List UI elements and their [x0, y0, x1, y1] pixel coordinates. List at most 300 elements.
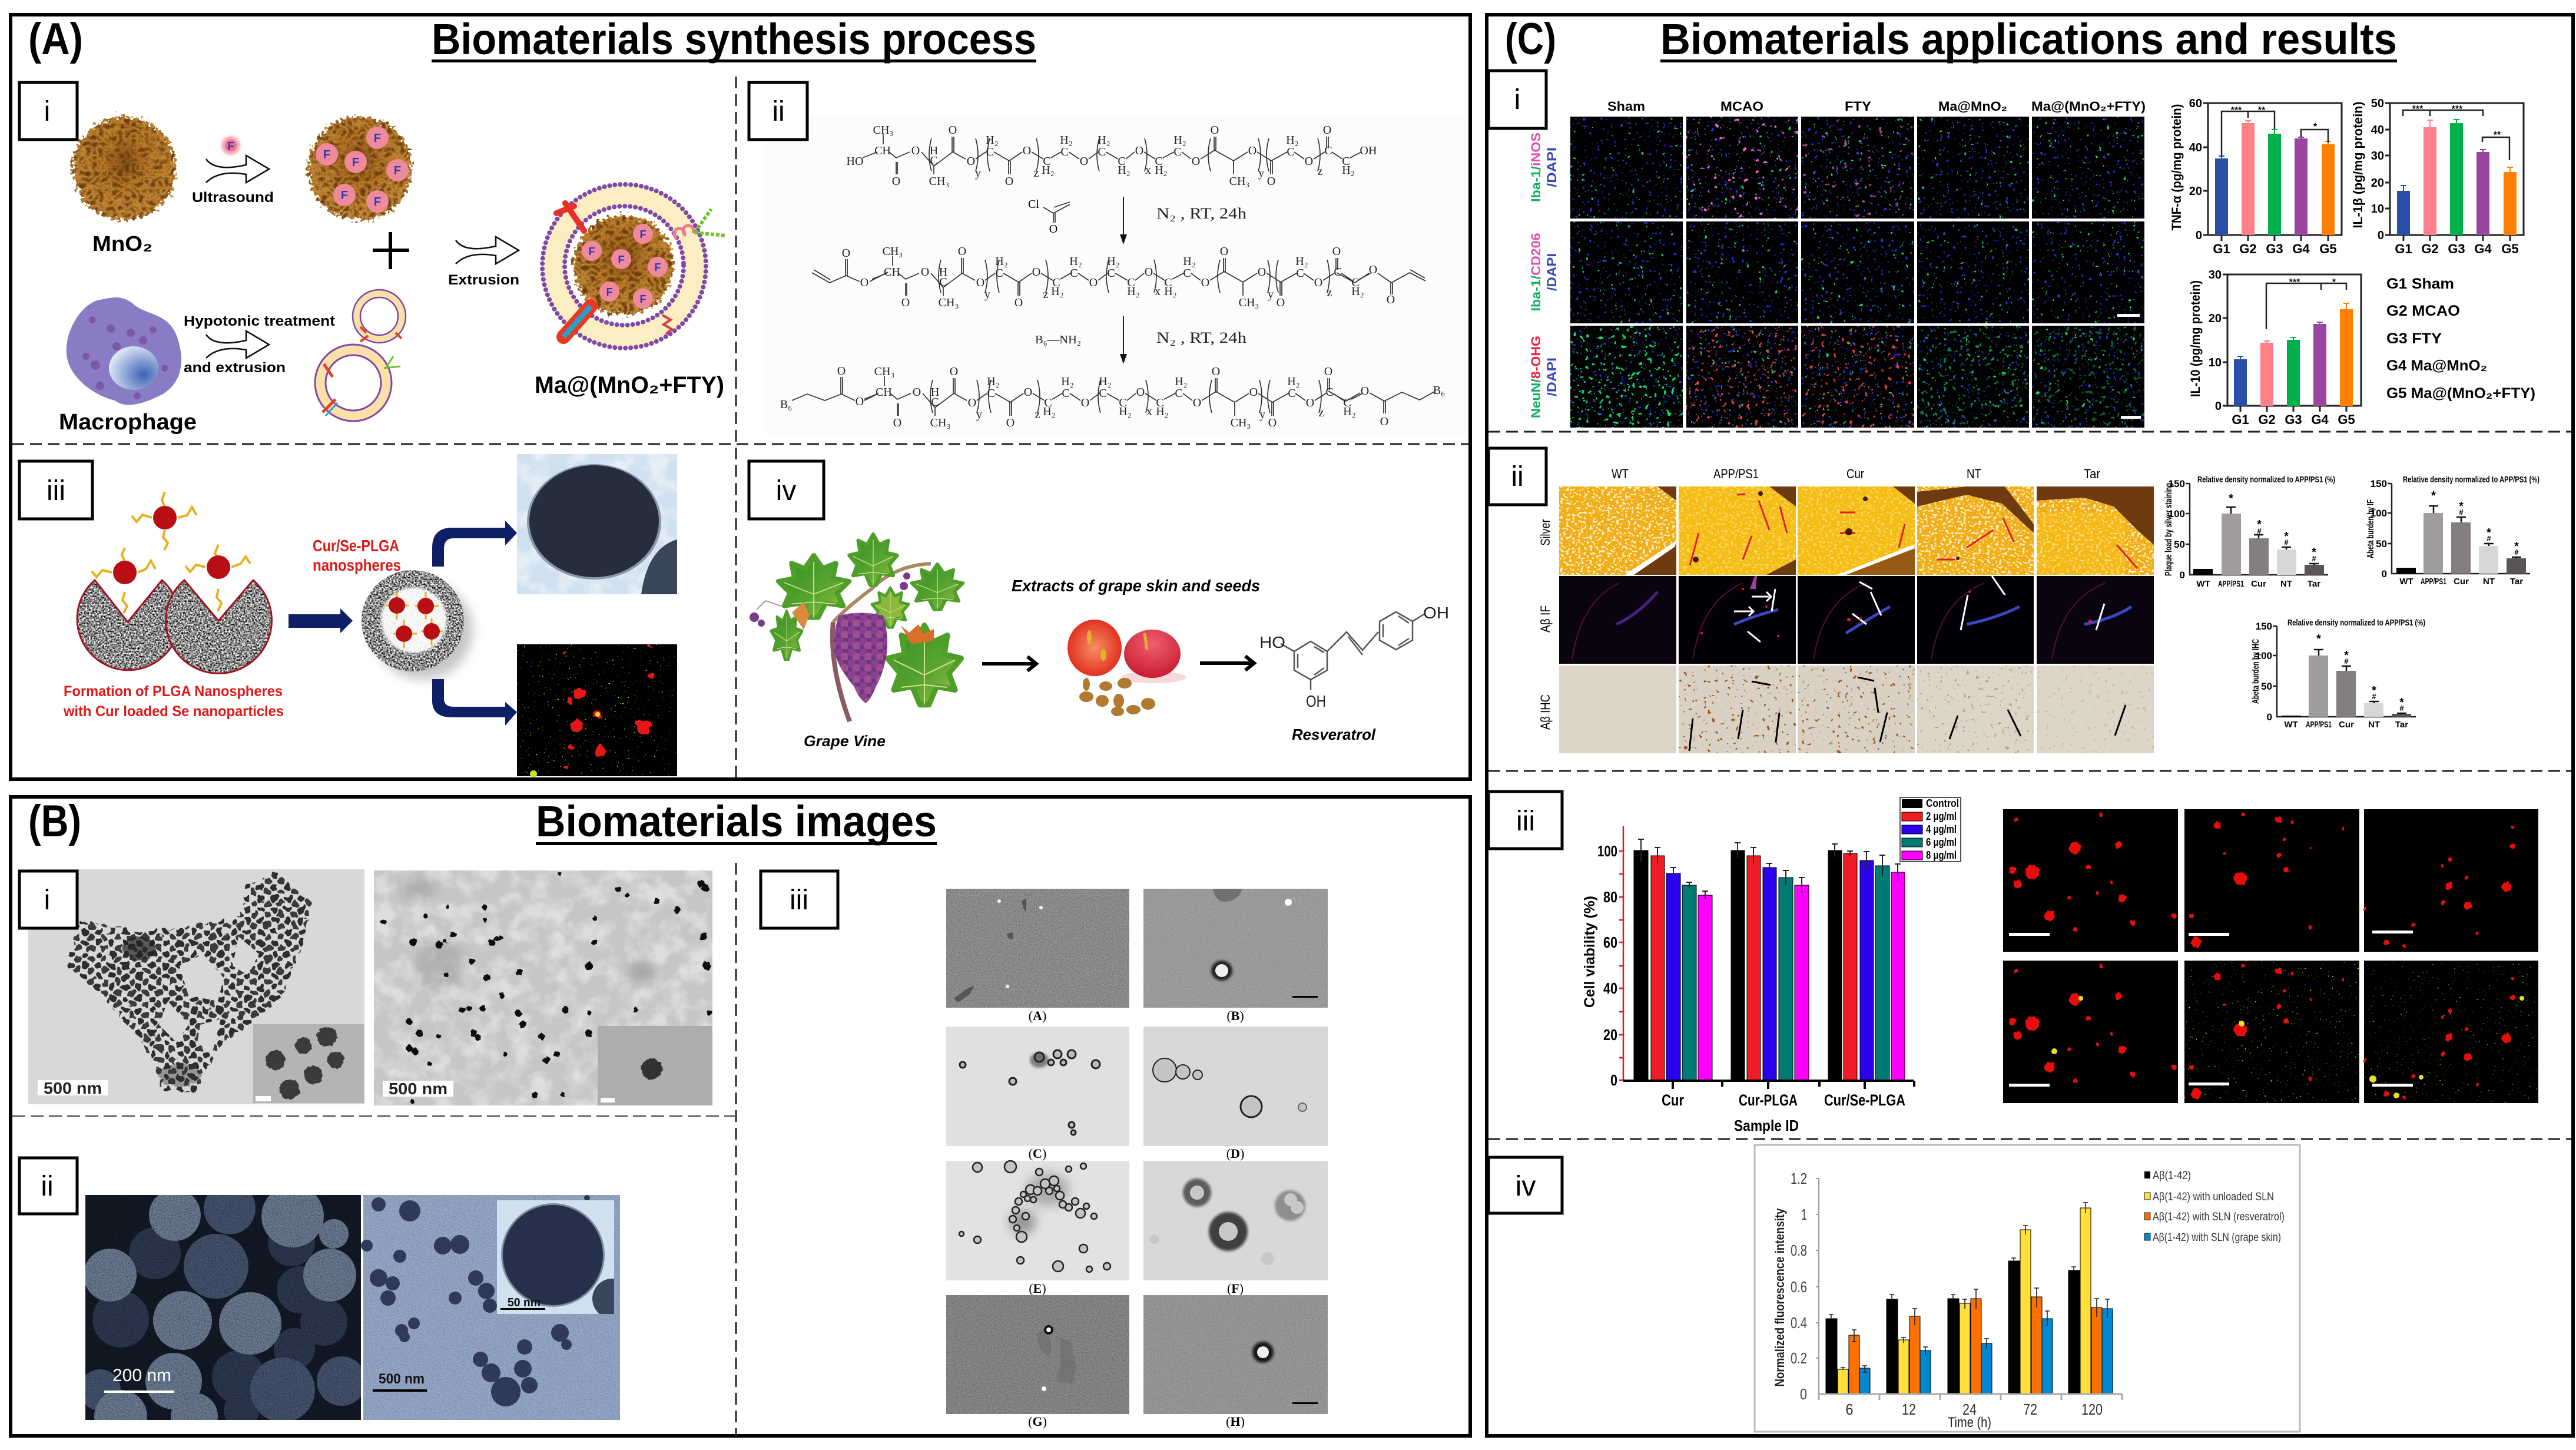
structure 3: O: [1361, 385, 1369, 398]
box label iv: iv: [1516, 1171, 1536, 1202]
sub-panel B-iii: TEM grid A to H: [761, 871, 1328, 1429]
chart: Abeta burden by IF: Cur: [2454, 577, 2469, 587]
structure 3: C: [1156, 396, 1164, 409]
scale 500 nm: 500 nm: [379, 1371, 425, 1387]
title: Biomaterials synthesis process: Biomaterials synthesis process: [432, 15, 1036, 64]
chart: plaque load by silver staining: *: [2257, 518, 2262, 531]
inset: [253, 1024, 364, 1103]
chart: plaque load by silver staining: 0: [2180, 570, 2185, 581]
MnO2 sphere loaded with FTY: F: [341, 189, 348, 202]
box label i: [1488, 71, 1546, 128]
chart: IL-10: [2188, 269, 2361, 427]
structure 3: C: [1099, 387, 1107, 400]
box label ii: [749, 82, 807, 140]
column headers: Ma@MnO₂: [1938, 99, 2007, 114]
box label iii: [19, 461, 92, 519]
grape halves and seeds: [1067, 620, 1186, 716]
structure 2: CH₃: [1239, 296, 1259, 309]
structure 2: C: [1052, 276, 1060, 289]
reaction arrow 1 with acryloyl chloride: O: [1049, 223, 1057, 236]
structure 2: O: [1015, 296, 1023, 309]
legend: Aβ(1-42) with unloaded SLN: [2153, 1191, 2274, 1203]
structure 3: H₂: [1119, 405, 1132, 418]
chart: cell viability: Cur: [1662, 1091, 1684, 1109]
structure 1: z: [1318, 165, 1323, 178]
fluorescence images: red channel row: [2003, 809, 2538, 952]
title: Biomaterials images: Biomaterials images: [536, 797, 937, 846]
column headers: Ma@(MnO₂+FTY): [2031, 99, 2146, 114]
structure 2: C: [1296, 267, 1304, 280]
chart: Abeta burden by IHC: 100: [2256, 650, 2272, 661]
box label ii: ii: [772, 96, 785, 127]
chart: normalized fluorescence intensity: [1755, 1145, 2300, 1432]
Ma@(MnO2+FTY) vesicle: F: [589, 246, 595, 257]
chart: Abeta burden by IHC: WT: [2284, 720, 2298, 730]
row labels: /DAPI: [1544, 147, 1559, 187]
chart: Abeta burden by IHC: 50: [2261, 681, 2272, 692]
row labels: /DAPI: [1544, 357, 1559, 396]
chart: normalized fluorescence intensity: 6: [1845, 1401, 1854, 1418]
box label iii: [761, 871, 838, 928]
structure 2: O: [1332, 245, 1341, 258]
chart: Abeta burden by IF: 100: [2371, 508, 2387, 519]
structure 3: z: [1319, 406, 1324, 419]
structure 3: C: [1288, 387, 1296, 400]
chart: IL-10: ***: [2289, 277, 2300, 287]
chart: Abeta burden by IF: APP/PS1: [2421, 577, 2446, 587]
chart: Abeta burden by IHC: Tar: [2395, 720, 2408, 730]
MnO2 sphere loaded with FTY: F: [323, 148, 330, 161]
structure 3: C: [1062, 387, 1070, 400]
structure 2: O: [958, 245, 966, 258]
chart: cell viability: Cur-PLGA: [1739, 1091, 1798, 1109]
Ma@(MnO2+FTY) vesicle: F: [618, 254, 624, 266]
structure 2: O: [1032, 266, 1040, 279]
structure 1: C: [1060, 145, 1069, 158]
structure 3: CH₃: [874, 365, 894, 378]
structure 2: H₂: [1295, 255, 1308, 268]
structure 2: CH₃: [939, 296, 959, 309]
column headers: Sham: [1607, 99, 1645, 114]
MnO2 sphere loaded with FTY: F: [374, 132, 381, 145]
caption A: (A): [1029, 1008, 1046, 1023]
plus sign: [373, 232, 409, 269]
resveratrol molecule: [1259, 604, 1449, 710]
structure 1: O: [1305, 155, 1313, 168]
fluorescence images: merged row: [2003, 961, 2538, 1103]
structure 3: y: [976, 408, 982, 421]
MnO2 sphere loaded with FTY: F: [394, 164, 401, 177]
chart: Abeta burden by IF: 150: [2371, 478, 2387, 489]
structure 2: O: [842, 247, 850, 260]
chart: plaque load by silver staining: #: [2257, 527, 2262, 535]
caption F: (F): [1227, 1281, 1244, 1296]
group legend: G1 Sham: [2386, 276, 2454, 292]
structure 2: C: [1070, 267, 1078, 280]
structure 1: H₂: [1060, 134, 1073, 147]
small membrane vesicles: [315, 290, 406, 421]
chart: Abeta burden by IF: *: [2431, 489, 2436, 502]
structure 2: H₂: [1351, 285, 1364, 298]
chart: IL-10: G2: [2258, 412, 2276, 427]
chart: IL-10: G5: [2338, 412, 2355, 427]
chart: IL-1 beta: G3: [2448, 241, 2465, 256]
structure 1: C: [1043, 155, 1051, 168]
formation caption: with Cur loaded Se nanoparticles: [63, 703, 284, 720]
chart: IL-1 beta: 20: [2371, 177, 2384, 190]
row labels: [1538, 519, 1553, 730]
chart: TNF-alpha: G4: [2292, 241, 2310, 256]
sub-panel A-iii: Cur/Se-PLGA nanospheres: [19, 454, 677, 777]
caption H: (H): [1226, 1414, 1245, 1429]
structure 3: B₆: [1433, 384, 1445, 397]
structure 2: O: [1201, 276, 1209, 289]
chart: IL-1 beta: 50: [2371, 97, 2384, 110]
Ma@(MnO2+FTY) vesicle: F: [639, 229, 647, 240]
chart: Abeta burden by IF: #: [2459, 508, 2464, 517]
structure 3: C: [931, 396, 939, 409]
chart: normalized fluorescence intensity: 0.4: [1791, 1314, 1807, 1332]
box label iii: iii: [790, 885, 808, 916]
sub-panel A-iv: grape extract to resveratrol: [749, 461, 1449, 750]
chart: plaque load by silver staining: NT: [2280, 579, 2292, 589]
panel C: biomaterials applications and results: [1487, 14, 2573, 1436]
label (C): (C): [1505, 14, 1556, 64]
caption G: (G): [1028, 1414, 1047, 1429]
structure 1: O: [1323, 124, 1331, 137]
tile E: [946, 1161, 1129, 1280]
chart: TNF-alpha: G3: [2266, 241, 2283, 256]
structure 1: CH: [874, 144, 891, 157]
group legend: G3 FTY: [2386, 330, 2442, 347]
structure 1: x: [1145, 164, 1151, 177]
structure 1: O: [1135, 144, 1143, 157]
legend: Aβ(1-42) with SLN (grape skin): [2153, 1231, 2281, 1244]
FTY particle: F: [227, 140, 234, 152]
structure 3: H₂: [1343, 405, 1356, 418]
Ma@(MnO2+FTY) vesicle: F: [606, 286, 612, 298]
structure 3: O: [1212, 365, 1220, 378]
structure 1: C: [1118, 155, 1126, 168]
chart: normalized fluorescence intensity: Time (h): [1948, 1415, 1991, 1431]
chart: plaque load by silver staining: APP/PS1: [2218, 579, 2244, 589]
structure 2: CH: [884, 266, 900, 279]
chart: Abeta burden by IHC: Cur: [2339, 720, 2354, 730]
structure 2: C: [1334, 266, 1342, 279]
MnO2 label: MnO₂: [92, 231, 152, 256]
chart: IL-1 beta: 40: [2371, 124, 2384, 137]
chart: normalized fluorescence intensity: 0.6: [1791, 1278, 1807, 1296]
row labels: Iba-1/CD206: [1529, 233, 1543, 311]
column headers: NT: [1967, 466, 1981, 481]
chart: TNF-alpha: [2169, 97, 2342, 256]
structure 2: C: [1164, 276, 1172, 289]
sub-panel C-iv: [1488, 1145, 2300, 1432]
immunofluorescence row 3: [1570, 326, 2144, 428]
SEM image: [79, 1183, 366, 1443]
column headers: Cur: [1846, 466, 1864, 481]
box label ii: ii: [41, 1171, 54, 1202]
label (A): (A): [28, 14, 83, 64]
column headers: [1607, 99, 2146, 114]
structure 3: H: [931, 386, 939, 399]
Ma@(MnO2+FTY) label: Ma@(MnO₂+FTY): [535, 372, 724, 398]
box label i: [19, 871, 77, 928]
structure 1: O: [1211, 124, 1219, 137]
TEM image of nanosphere: [517, 454, 677, 594]
structure 3: y: [1259, 408, 1265, 421]
chart: plaque load by silver staining: #: [2284, 538, 2289, 547]
chart: Abeta burden by IHC: [2251, 618, 2425, 730]
structure 3: O: [1024, 386, 1032, 399]
Hypotonic treatment text: Hypotonic treatment: [184, 313, 335, 329]
structure 3: [780, 365, 1445, 429]
MnO2 sphere loaded with FTY: [308, 117, 412, 220]
structure 2: [812, 245, 1425, 309]
chart: IL-10: IL-10 (pg/mg protein): [2188, 280, 2203, 397]
structure 3: H₂: [1043, 405, 1056, 418]
formation caption: [63, 683, 284, 720]
chart: IL-10: 30: [2209, 269, 2222, 282]
reaction arrow 2 with B6-NH2: N₂ , RT, 24h: [1156, 329, 1246, 346]
Grape Vine label: Grape Vine: [804, 732, 886, 750]
silver stain row: [1559, 486, 2154, 575]
chart: normalized fluorescence intensity: 12: [1902, 1401, 1916, 1418]
nanosphere: [362, 570, 473, 680]
structure 1: H₂: [1342, 164, 1355, 177]
structure 1: O: [1248, 144, 1256, 157]
arrow to grapes: [982, 657, 1036, 671]
structure 2: O: [976, 276, 984, 289]
chart: Abeta burden by IF: Abeta burden by IF: [2366, 499, 2376, 558]
Ultrasound text: Ultrasound: [192, 190, 274, 206]
structure 3: H₂: [1287, 375, 1300, 388]
structure 1: C: [1155, 155, 1163, 168]
sub-panel C-i: [1488, 71, 2535, 428]
structure 3: O: [856, 395, 864, 408]
chart: plaque load by silver staining: 50: [2174, 539, 2185, 550]
scale 500 nm: [373, 1371, 427, 1392]
column headers: MCAO: [1720, 99, 1763, 114]
structure 1: O: [1005, 175, 1013, 188]
tile D: [1143, 1027, 1328, 1146]
chart: Abeta burden by IF: Tar: [2510, 577, 2523, 587]
structure 1: H₂: [986, 134, 999, 147]
row labels: /DAPI: [1544, 253, 1559, 291]
structure 3: O: [950, 365, 958, 378]
chart: TNF-alpha: G2: [2239, 241, 2257, 256]
structure 3: O: [1006, 416, 1015, 429]
structure 1: O: [1080, 155, 1088, 168]
scale 200 nm: [104, 1366, 174, 1393]
box label iv: [1488, 1157, 1562, 1213]
chart: plaque load by silver staining: Cur: [2251, 579, 2266, 589]
chart: cell viability: 60: [1603, 933, 1617, 951]
structure 3: O: [1249, 386, 1258, 399]
immunofluorescence row 1: [1570, 117, 2144, 219]
resveratrol molecule: OH: [1306, 692, 1326, 710]
structure 2: O: [1369, 263, 1377, 276]
inset TEM: 50 nm: [508, 1296, 541, 1309]
formation caption: Formation of PLGA Nanospheres: [64, 683, 283, 700]
column headers: APP/PS1: [1713, 466, 1759, 481]
arrow up to TEM: [432, 521, 517, 567]
chart: TNF-alpha: TNF-α (pg/mg protein): [2169, 104, 2184, 231]
chart: Abeta burden by IHC: *: [2344, 649, 2349, 662]
legend: Control: [1926, 797, 1959, 809]
chart: TNF-alpha: **: [2258, 105, 2266, 115]
chart: TNF-alpha: 40: [2189, 141, 2202, 154]
legend: 4 μg/ml: [1926, 823, 1957, 835]
chart: Abeta burden by IHC: 150: [2256, 621, 2272, 632]
chart: cell viability: [1582, 797, 1961, 1134]
group legend: G5 Ma@(MnO₂+FTY): [2386, 385, 2535, 402]
caption C: (C): [1029, 1146, 1046, 1161]
chart: IL-1 beta: **: [2494, 130, 2501, 140]
chart: TNF-alpha: G1: [2213, 241, 2230, 256]
group legend: [2386, 276, 2535, 402]
arrow to nanosphere: [289, 608, 353, 633]
structure 3: CH₃: [1231, 416, 1251, 429]
chart: TNF-alpha: G5: [2319, 241, 2337, 256]
reaction arrow 1 with acryloyl chloride: Cl: [1028, 198, 1039, 211]
chart: TNF-alpha: 20: [2189, 185, 2202, 198]
chart: normalized fluorescence intensity: 24: [1962, 1401, 1977, 1418]
chart: normalized fluorescence intensity: 0: [1800, 1385, 1807, 1403]
chart: Abeta burden by IF: *: [2487, 527, 2491, 539]
box label i: i: [1514, 84, 1520, 115]
box label iii: iii: [47, 475, 65, 506]
caption E: (E): [1029, 1281, 1046, 1296]
structure 3: O: [837, 365, 846, 378]
chart: cell viability: Cell viability (%): [1582, 896, 1598, 1008]
chart: normalized fluorescence intensity: Normalized fluorescence intensity: [1772, 1208, 1787, 1386]
Ma@(MnO2+FTY) vesicle: [542, 184, 725, 348]
structure 1: O: [1023, 144, 1031, 157]
immunofluorescence row: [1559, 576, 2154, 664]
chart: IL-1 beta: G5: [2501, 241, 2519, 256]
and extrusion text: and extrusion: [184, 360, 286, 376]
box label iv: iv: [776, 475, 796, 506]
Ma@(MnO2+FTY) vesicle: F: [639, 293, 647, 305]
legend: [2144, 1170, 2285, 1244]
row labels: Silver: [1538, 519, 1553, 545]
Cur/Se-PLGA label: Cur/Se-PLGA: [313, 537, 399, 555]
structure 3: z: [1035, 408, 1040, 421]
structure 3: O: [1081, 396, 1089, 409]
box label iii: iii: [1516, 806, 1535, 837]
structure 1: H₂: [1286, 134, 1299, 147]
chart: TNF-alpha: 0: [2196, 229, 2202, 242]
structure 1: O: [1267, 175, 1275, 188]
chart: Abeta burden by IF: *: [2514, 540, 2519, 553]
chart: plaque load by silver staining: *: [2229, 492, 2233, 505]
structure 1: C: [1324, 144, 1332, 157]
row labels: Aβ IF: [1538, 605, 1553, 633]
structure 2: H₂: [1127, 285, 1140, 298]
box label iv: [749, 461, 824, 519]
structure 3: H₂: [1099, 375, 1112, 388]
box label i: i: [44, 885, 50, 916]
structure 1: O: [892, 175, 900, 188]
chart: Abeta burden by IHC: #: [2372, 692, 2376, 701]
chart: Abeta burden by IHC: #: [2399, 704, 2404, 713]
chart: IL-1 beta: [2350, 97, 2524, 256]
structure 1: z: [1034, 167, 1039, 180]
chart: cell viability: Cur/Se-PLGA: [1824, 1091, 1905, 1109]
row labels: [1529, 133, 1559, 418]
chart: TNF-alpha: 60: [2189, 97, 2202, 110]
chart: plaque load by silver staining: 150: [2169, 478, 2185, 489]
group legend: G4 Ma@MnO₂: [2386, 357, 2487, 374]
structure 2: O: [1089, 276, 1098, 289]
structure 2: y: [984, 288, 990, 301]
structure 3: C: [1175, 387, 1183, 400]
structure 2: O: [1314, 276, 1322, 289]
legend: Aβ(1-42): [2153, 1170, 2191, 1182]
chart: IL-10: G4: [2311, 412, 2329, 427]
immunohistochemistry row: [1559, 666, 2154, 753]
structure 2: O: [921, 266, 929, 279]
chart: IL-1 beta: G4: [2474, 241, 2492, 256]
sub-panel C-iii: [1488, 792, 2538, 1134]
structure 1: H₂: [1155, 164, 1168, 177]
MnO2 sphere: [72, 117, 176, 220]
box label ii: [1488, 448, 1546, 505]
structure 1: C: [930, 154, 938, 167]
resveratrol molecule: HO: [1259, 633, 1285, 651]
chart: cell viability: 80: [1603, 888, 1617, 906]
inset TEM: [497, 1200, 632, 1319]
chart: plaque load by silver staining: 100: [2169, 508, 2185, 519]
Ma@(MnO2+FTY) vesicle: F: [655, 261, 661, 273]
chart: cell viability: 40: [1603, 979, 1617, 997]
structure 2: H₂: [1107, 255, 1120, 268]
structure 2: C: [1351, 276, 1360, 289]
chart: cell viability: 20: [1603, 1026, 1617, 1044]
chart: normalized fluorescence intensity: 0.2: [1791, 1349, 1807, 1367]
structure 1: C: [1287, 145, 1295, 158]
chart: IL-1 beta: 10: [2371, 203, 2384, 216]
structure 3: O: [1268, 416, 1277, 429]
structure 2: C: [1127, 276, 1135, 289]
reaction arrow 1 with acryloyl chloride: [1028, 197, 1246, 244]
chart: Abeta burden by IHC: APP/PS1: [2306, 720, 2332, 730]
structure 3: O: [893, 416, 901, 429]
column headers: WT: [1612, 466, 1629, 481]
arrow: hypotonic treatment: [206, 331, 269, 358]
title: Biomaterials applications and results: Biomaterials applications and results: [1660, 15, 2397, 64]
chart: plaque load by silver staining: *: [2312, 546, 2316, 559]
sub-panel A-i: MnO2 and macrophage vesicle scheme: [19, 82, 725, 435]
structure 3: C: [1119, 396, 1127, 409]
chart: normalized fluorescence intensity: 1.2: [1791, 1170, 1807, 1187]
tile B: [1143, 889, 1328, 1008]
structure 1: H₂: [1098, 134, 1110, 147]
structure 1: CH₃: [1229, 175, 1249, 188]
row labels: Iba-1/iNOS: [1529, 133, 1543, 202]
structure 2: x: [1155, 285, 1161, 298]
legend: 6 μg/ml: [1926, 836, 1957, 848]
structure 1: C: [1098, 145, 1106, 158]
sub-panel B-i: TEM images: [19, 869, 712, 1105]
box label ii: [19, 1158, 77, 1214]
scale label: 500 nm: [389, 1080, 447, 1098]
FTY particle: [221, 136, 240, 155]
sub-panel A-ii: polymer synthesis chemistry: [749, 82, 1466, 436]
structure 3: O: [1193, 396, 1201, 409]
structure 3: x: [1146, 405, 1152, 418]
